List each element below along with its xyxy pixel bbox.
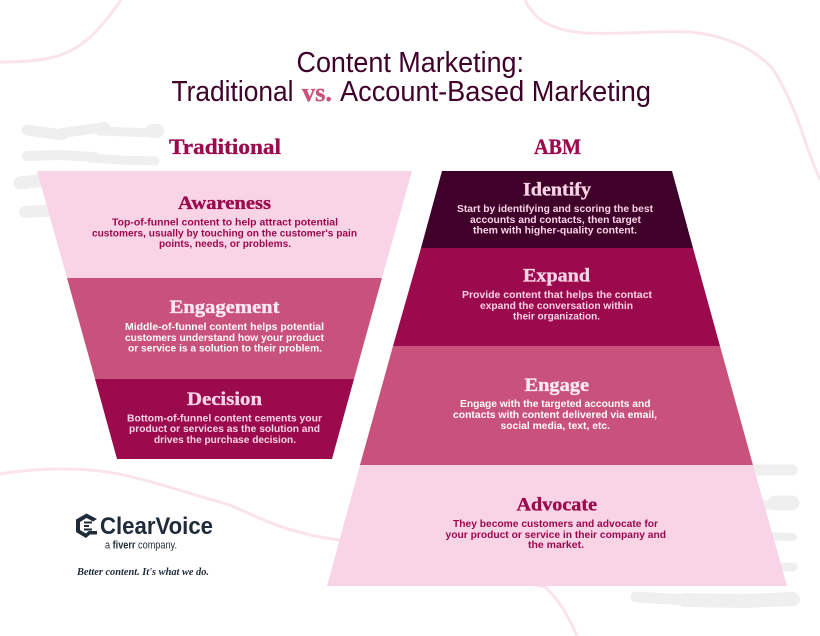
funnel tier: Decision [95, 379, 354, 459]
pyramid tier: Engage [360, 346, 753, 465]
pyramid tier: Advocate: your product or service in their company and [446, 530, 666, 541]
funnel tier: Decision: Bottom-of-funnel content cements your [127, 414, 322, 424]
pyramid tier: Expand: their organization. [513, 312, 600, 322]
funnel tier: Decision: drives the purchase decision. [154, 435, 296, 446]
icon: ClearVoice hexagon [76, 514, 97, 538]
pyramid tier: Expand: Expand [523, 266, 590, 286]
funnel tier: Engagement [67, 278, 382, 379]
pyramid tier: Expand: Provide content that helps the contact [462, 290, 653, 301]
background brush strokes [20, 127, 793, 601]
pyramid tier: Identify: them with higher-quality content. [473, 226, 637, 236]
funnel tier: Awareness [37, 171, 412, 278]
funnel tier: Awareness: customers, usually by touching on the customer's pain [92, 228, 357, 240]
pyramid tier: Advocate: Advocate [516, 494, 597, 516]
heading: ABM: ABM [534, 134, 581, 159]
panel: traditional funnel [37, 171, 412, 459]
pyramid tier: Identify: Start by identifying and scoring the best [457, 204, 654, 215]
pyramid tier: Advocate: They become customers and advocate for [453, 519, 658, 530]
heading: Traditional: Traditional [169, 134, 281, 159]
pyramid tier: Engage: contacts with content delivered via email, [453, 410, 657, 421]
funnel tier: Decision: product or services as the solution and [129, 424, 320, 435]
funnel tier: Decision: Decision [187, 389, 262, 410]
tagline: Better content. It's what we do. [76, 567, 209, 578]
funnel tier: Engagement: or service is a solution to their problem. [128, 344, 322, 354]
funnel tier: Awareness: Awareness [178, 193, 271, 214]
logo: ClearVoice: ClearVoice [100, 513, 213, 540]
title [172, 47, 651, 108]
panel: ABM pyramid [327, 171, 787, 586]
funnel tier: Engagement: customers understand how your product [125, 333, 325, 344]
pyramid tier: Advocate: the market. [528, 540, 584, 551]
pyramid tier: Advocate [327, 465, 787, 586]
logo: ClearVoice [76, 513, 213, 552]
pyramid tier: Engage: social media, text, etc. [500, 421, 610, 432]
pyramid tier: Expand [393, 248, 720, 346]
funnel tier: Engagement: Engagement [170, 297, 280, 318]
title: vs. [302, 78, 332, 107]
logo: ClearVoice: a fiverr company. [105, 540, 177, 552]
pyramid tier: Identify [421, 171, 693, 248]
funnel tier: Awareness: Top-of-funnel content to help attract potential [112, 218, 338, 228]
pyramid tier: Engage: Engage [524, 375, 589, 396]
pyramid tier: Expand: expand the conversation within [480, 301, 633, 312]
pyramid tier: Engage: Engage with the targeted accounts and [460, 399, 650, 410]
funnel tier: Awareness: points, needs, or problems. [159, 239, 291, 250]
title: Content Marketing: [296, 47, 524, 79]
pyramid tier: Identify: Identify [523, 180, 592, 200]
funnel tier: Engagement: Middle-of-funnel content helps potential [125, 322, 324, 333]
title: Traditional [172, 76, 294, 108]
title: Account-Based Marketing [340, 76, 651, 108]
pyramid tier: Identify: accounts and contacts, then target [470, 215, 642, 226]
